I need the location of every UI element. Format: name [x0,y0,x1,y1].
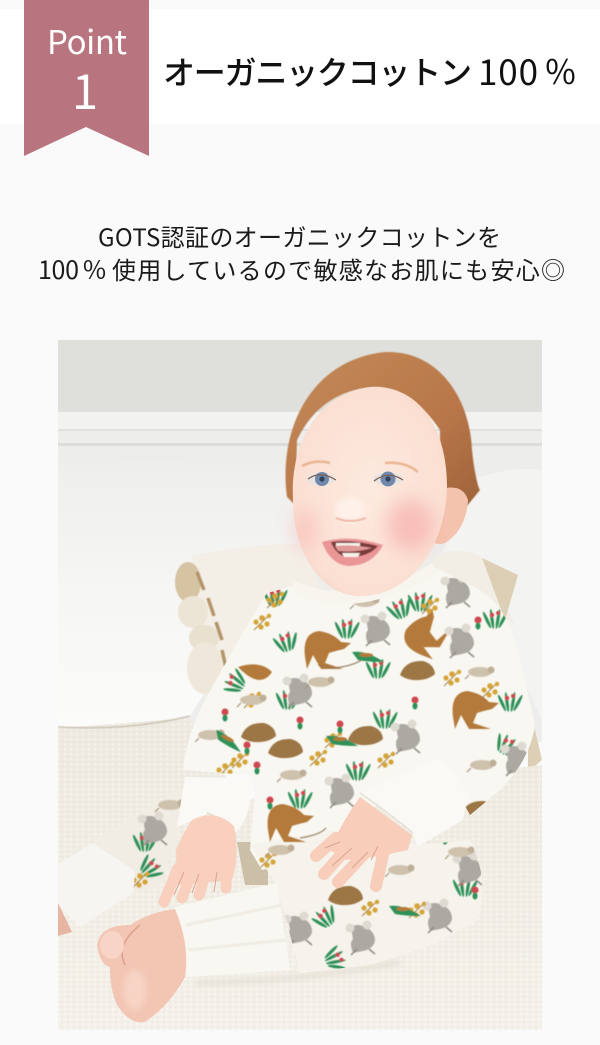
ribbon badge: Point 1: 1 [72,54,98,123]
sleeve cuff right [360,776,466,846]
foot [97,909,186,1022]
cheeks [386,499,434,551]
headboard [58,412,542,742]
right pillow [440,469,542,720]
face [293,387,447,596]
left leg cuff [58,843,135,927]
header band [0,9,600,124]
description text: ％ [82,251,107,287]
leg sock [175,883,290,977]
wall [58,340,542,416]
title: オーガニックコットン [163,48,472,94]
left hand [164,815,237,902]
bedding [58,716,542,1030]
eyes [307,472,403,486]
nose [335,498,366,522]
ear [434,488,468,544]
baby head [286,352,480,596]
ribbon badge: Point 1 [24,0,149,156]
title: 100 [478,45,538,96]
description text: 100 [38,251,79,287]
mouth [322,539,383,566]
left ankle [58,903,72,936]
photo: smiling baby in printed organic cotton romper [58,340,542,1030]
collar [319,564,434,604]
romper print [131,574,530,975]
cushion [192,543,542,772]
description text: 使用しているので敏感なお肌にも安心◎ [112,251,565,286]
description text [38,218,565,287]
title: ％ [544,46,577,94]
left pillow [58,578,262,728]
description text: GOTS認証のオーガニックコットンを [98,218,501,253]
title [163,45,577,96]
hair [286,352,480,512]
eyebrows [302,462,418,472]
ribbon badge: Point 1: Point [47,16,127,64]
left tassels [175,562,226,694]
right hand [316,797,412,886]
sleeve cuff left [177,777,251,835]
romper base [93,566,535,973]
